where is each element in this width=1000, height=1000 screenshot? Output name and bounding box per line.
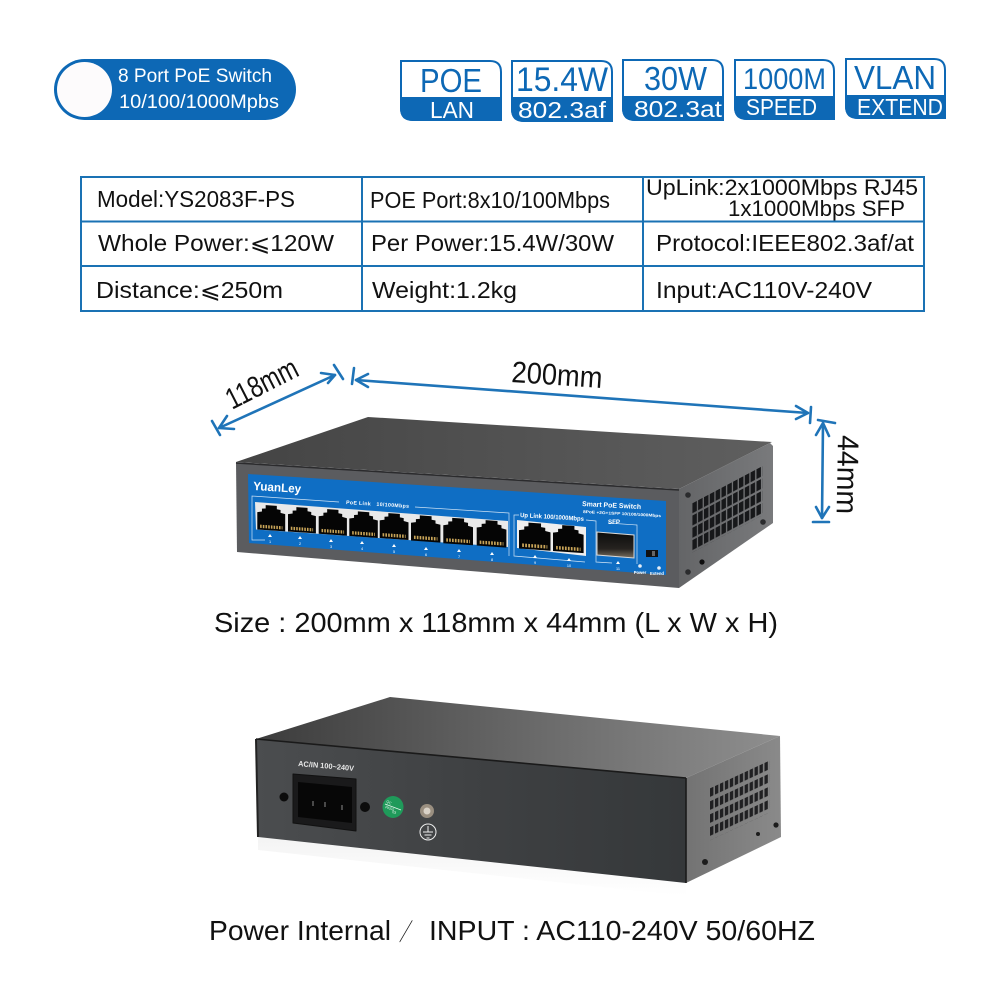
PoE ports 1-8 [257,504,506,548]
caption: size: Size : 200mm x 118mm x 44mm (L x W x H) [214,607,778,638]
port indicator markers and numbers: 11 [616,567,620,571]
ground symbol [420,824,436,840]
ground post [420,804,434,818]
specification table: Model:YS2083F-PS [97,186,295,212]
label: Smart PoE Switch: Smart PoE Switch [582,501,641,511]
switch side with vents [679,443,773,588]
badge: POE LAN [400,61,502,123]
mode switch [646,550,658,557]
SFP cage [597,532,634,558]
port indicator markers and numbers: 10 [567,564,571,568]
badge: 1000M SPEED: SPEED [746,94,817,120]
switch: rear view [256,697,781,896]
pill circle [57,62,112,117]
specification table: 1x1000Mbps SFP [728,196,905,221]
arrow: height 44mm [813,420,835,522]
power inlet [293,774,356,831]
caption: power input: Power Internal [209,915,391,946]
rear side with vents [686,736,781,883]
badge: 30W 802.3at: 802.3at [634,96,723,122]
badge: 30W 802.3at: 30W [644,60,708,97]
arrow: length 200mm [352,368,811,423]
port indicator markers and numbers: 7 [458,555,460,559]
label: Up Link: Up Link 100/1000Mbps [520,512,585,523]
port indicator markers and numbers [268,534,620,571]
blue port panel [248,474,666,576]
arrow: width 118mm [212,365,343,435]
badge: 15.4W 802.3af: 15.4W [516,61,608,99]
green pass sticker: QC [386,799,393,806]
green pass sticker: 03 [392,810,397,815]
port indicator markers and numbers: 4 [361,547,363,551]
label: AC/IN 100~240V: AC/IN 100~240V [298,759,354,773]
port indicator markers and numbers: 3 [330,545,332,549]
panel guide lines [252,496,637,564]
inlet screws [280,792,370,812]
badge: POE LAN: LAN [430,97,474,123]
badge: VLAN EXTEND [845,59,946,120]
white uplink port housing [517,520,586,556]
uplink ports 9-10 [519,522,584,553]
port indicator markers and numbers: 1 [269,540,271,544]
specification table: POE Port:8x10/100Mbps [370,187,610,213]
specification table: Protocol:IEEE802.3af/at [656,230,915,256]
caption: power input: INPUT : AC110-240V 50/60HZ [429,915,815,946]
label: 118mm: 118mm [220,352,304,416]
specification table [81,175,924,311]
power LED and label [634,564,647,575]
port indicator markers and numbers: 5 [393,550,395,554]
brand: YuanLey: YuanLey [253,479,302,496]
label: 44mm: 44mm [830,435,864,514]
extend LED and label [650,566,664,576]
badge: 1000M SPEED: 1000M [743,63,826,96]
port indicator markers and numbers: 6 [425,553,427,557]
ground shadow [258,837,686,896]
switch front plate [236,462,679,588]
green pass sticker: PASS [385,805,395,812]
rear top cover [256,697,780,778]
badge: 15.4W 802.3af [511,61,613,123]
specification table: Weight:1.2kg [372,277,517,303]
power LED and label: Power [634,570,647,575]
port indicator markers and numbers: 2 [299,542,301,546]
white PoE port housing [255,502,508,547]
switch: front view [236,417,773,588]
badge: POE LAN: POE [420,62,482,99]
label: PoE Link: PoE Link 10/100Mbps [346,500,409,510]
badge: 15.4W 802.3af: 802.3af [518,97,607,123]
label: port summary: 8PoE +2G+1SFP 10/100/1000Mbps [583,509,662,518]
label: SFP: SFP [608,520,620,526]
badge: 1000M SPEED [734,60,835,120]
green pass sticker [382,796,404,818]
caption: power input [209,912,815,947]
pill speed: 10/100/1000Mpbs [119,92,279,113]
pill heading: 8 Port PoE Switch [118,66,272,87]
label: 200mm: 200mm [511,356,604,395]
badge: VLAN EXTEND: EXTEND [857,94,943,120]
port indicator markers and numbers: 9 [534,561,536,565]
pill: product name [54,59,296,120]
switch top cover [236,417,772,489]
specification table: UpLink:2x1000Mbps RJ45 [646,175,918,200]
specification table: Input:AC110V-240V [656,277,873,303]
extend LED and label: Extend [650,571,664,576]
caption: power input: ／ [399,912,413,947]
specification table: Per Power:15.4W/30W [371,230,614,256]
badge: 30W 802.3at [622,60,724,122]
specification table: Distance:⩽250m [96,277,283,303]
rear plate [256,739,686,883]
badge: VLAN EXTEND: VLAN [854,59,936,96]
port indicator markers and numbers: 8 [491,558,493,562]
specification table: Whole Power:⩽120W [98,230,334,256]
